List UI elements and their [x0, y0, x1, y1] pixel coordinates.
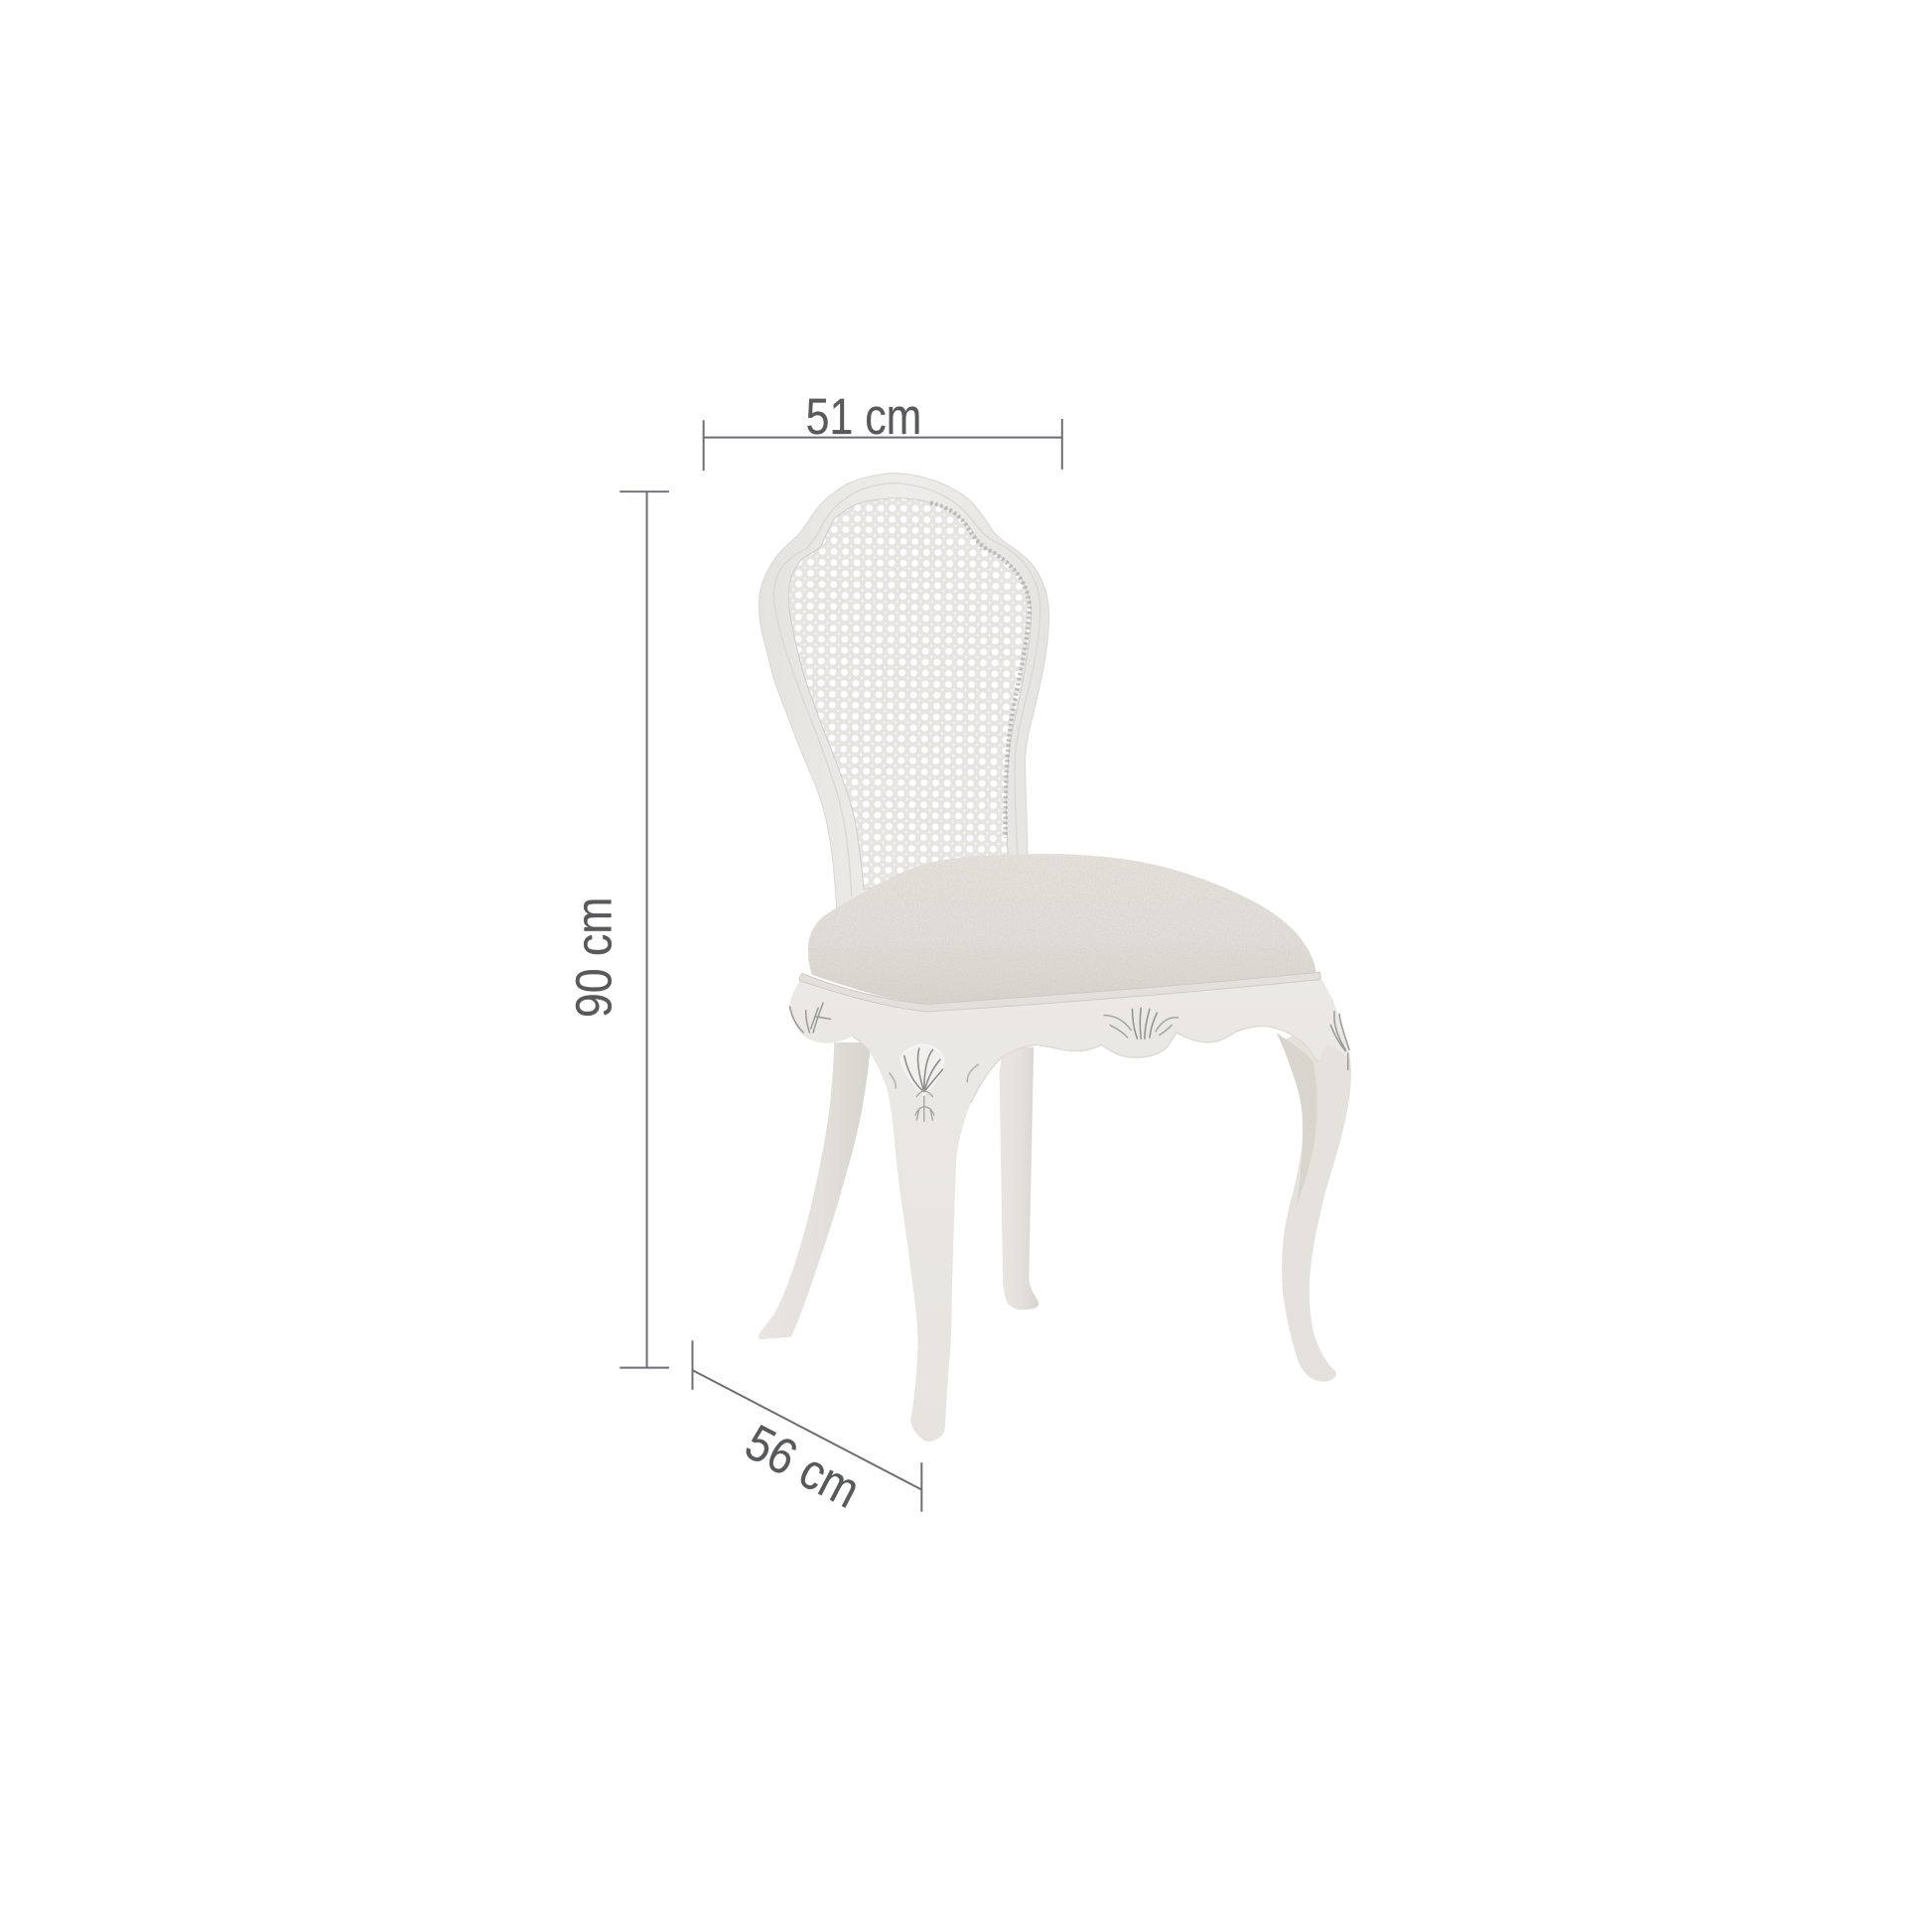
apron carved edge — [853, 1026, 1319, 1103]
depth label: 56 cm — [737, 1414, 869, 1519]
cane shadow edge — [930, 502, 1030, 838]
height label: 90 cm — [566, 897, 622, 1018]
width label: 51 cm — [806, 388, 921, 445]
shell grooves — [904, 1048, 942, 1092]
seat cushion — [808, 854, 1315, 1004]
cane panel — [789, 498, 1032, 890]
carving: left apron ornament — [790, 1003, 830, 1033]
seat piping — [799, 972, 1320, 1012]
carving: front corner shell — [890, 1044, 978, 1121]
depth arrow line — [692, 1340, 921, 1512]
dimension: width 51 cm — [704, 388, 1062, 471]
back frame inner moulding — [774, 483, 1040, 896]
carving: leg edge scrolls — [890, 1064, 978, 1088]
carving: right corner shell — [1330, 1012, 1349, 1069]
width arrow line — [704, 419, 1062, 471]
shell fan — [900, 1044, 944, 1094]
front leg and seat apron — [789, 976, 1350, 1442]
right leg inner shadow — [1277, 1033, 1316, 1207]
right front leg — [1282, 1023, 1351, 1382]
back right leg — [1000, 1047, 1038, 1310]
dimension: height 90 cm — [566, 491, 669, 1368]
chair — [759, 474, 1351, 1442]
back frame — [759, 474, 1049, 911]
shell base — [915, 1091, 934, 1121]
height arrow line — [620, 491, 669, 1368]
carving: apron centre shell — [1104, 1008, 1177, 1038]
back left leg — [759, 1042, 870, 1339]
dimension: depth 56 cm — [692, 1340, 921, 1519]
